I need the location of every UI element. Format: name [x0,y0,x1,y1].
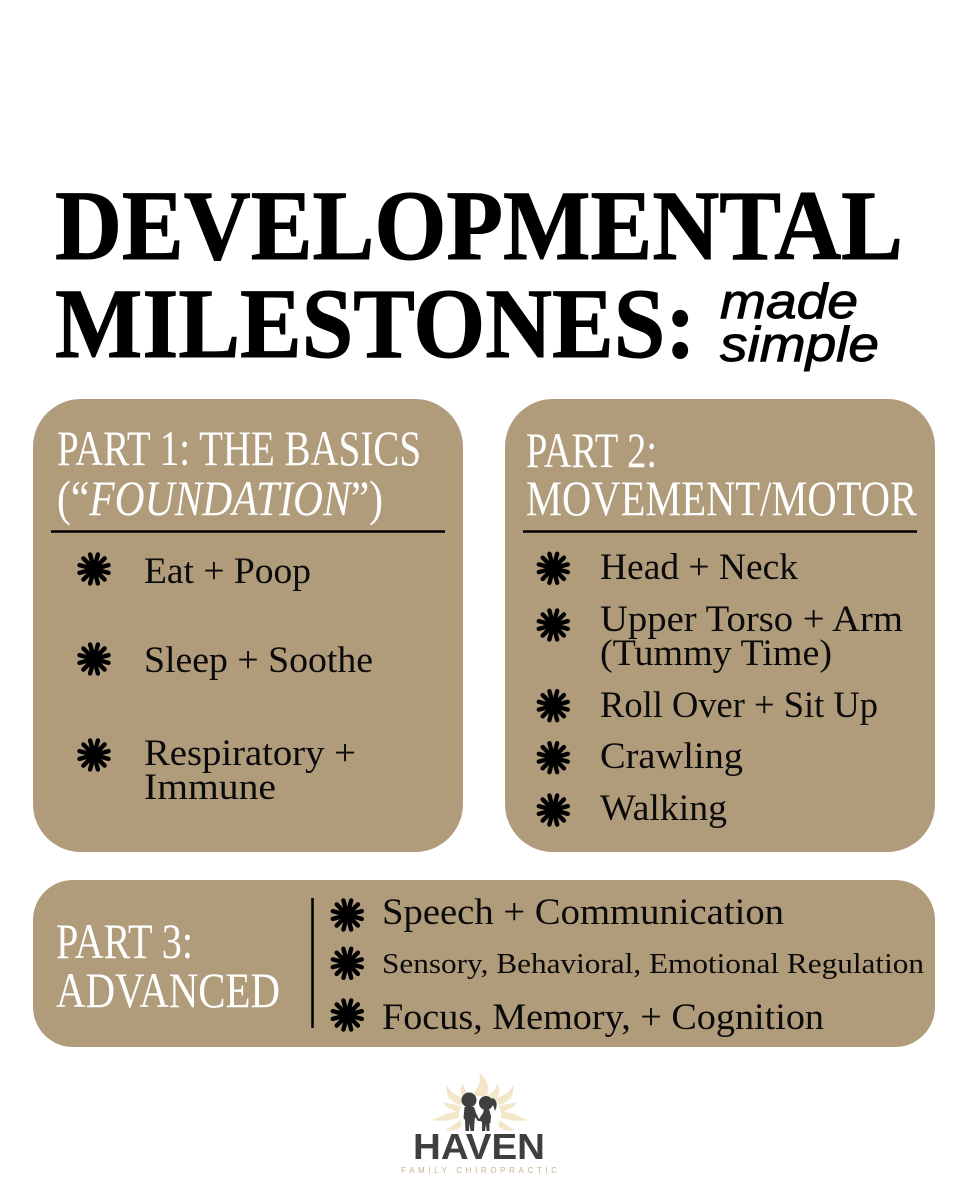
subtitle: made simple [720,275,879,372]
item: eat + poop [76,551,311,592]
heading: part 2: PART 2: [526,422,657,478]
item: respiratory + immune: Respiratory + [144,733,356,774]
panel: part 2 movement/motor [505,399,935,852]
title [55,170,903,379]
subtitle: made simple: simple [720,318,879,372]
item: focus, memory, cognition: Focus, Memory, + Cognition [382,997,824,1038]
item: upper torso + arm [535,599,903,674]
subtitle: made simple: made [720,275,858,329]
item: roll over + sit up: Roll Over + Sit Up [600,685,878,726]
item: sleep + soothe: Sleep + Soothe [144,640,373,681]
item: walking: Walking [600,788,727,829]
icon: two children holding hands [462,1092,497,1131]
heading: part 1 [57,420,421,526]
title: DEVELOPMENTAL [55,170,903,281]
item: respiratory + immune: Immune [144,767,276,808]
item: crawling: Crawling [600,736,743,777]
panel: part 1 the basics [33,399,463,852]
item: speech + communication: Speech + Communication [382,892,784,933]
item: walking [535,788,727,829]
item: respiratory + immune [76,733,356,808]
heading: part 3: PART 3: [56,913,193,969]
item: crawling [535,736,743,777]
heading: part 1: (“FOUNDATION”) [57,470,383,526]
heading: part 1: PART 1: THE BASICS [57,420,421,476]
item: upper torso + arm: Upper Torso + Arm [600,599,903,640]
logo tagline: FAMILY CHIROPRACTIC [401,1166,557,1175]
panel: part 3 advanced [33,880,935,1047]
item: sensory, behavioral, emotional regulation: Sensory, Behavioral, Emotional Regulation [382,949,924,980]
heading: part 3: ADVANCED [56,962,280,1018]
item: sensory, behavioral, emotional regulation [329,945,924,982]
item: upper torso + arm: (Tummy Time) [600,633,832,674]
logo: haven family chiropractic [401,1072,557,1175]
icon: sun rays [432,1072,528,1131]
item: head + neck: Head + Neck [600,547,799,588]
title: MILESTONES: [55,268,696,379]
heading: part 3 [56,913,280,1018]
heading: part 2 [526,422,918,526]
item: eat + poop: Eat + Poop [144,551,311,592]
logo wordmark: HAVEN [413,1126,545,1167]
